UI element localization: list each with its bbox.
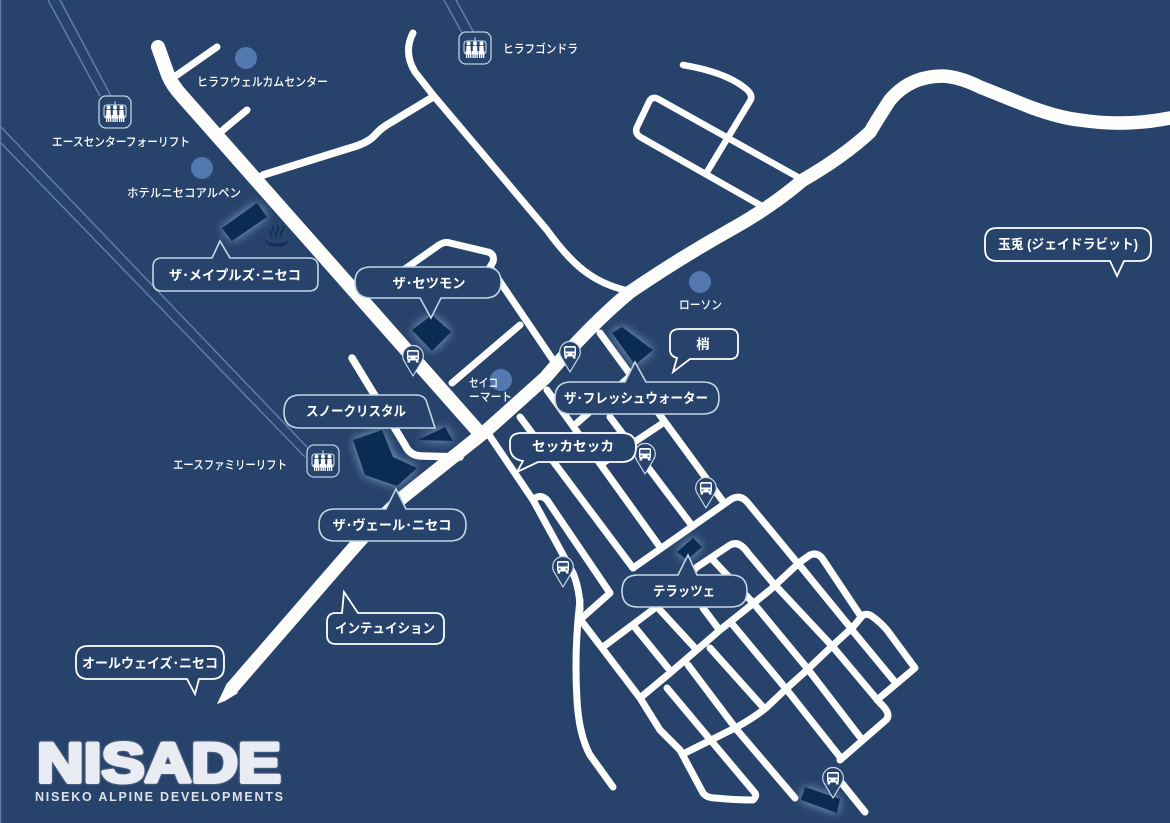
callout: the freshwater xyxy=(555,362,719,414)
main road tapered tip xyxy=(217,683,238,704)
poi: seicomart xyxy=(469,369,512,404)
poi: lawson xyxy=(679,271,722,312)
central cross streets xyxy=(577,372,635,423)
south loop street xyxy=(583,623,756,800)
setsumon loop xyxy=(375,242,553,360)
callout: jade rabbit: 玉兎 (ジェイドラビット) xyxy=(998,236,1138,252)
building: the setsumon xyxy=(412,315,451,351)
bus stop pin xyxy=(696,478,716,508)
callout: the freshwater: ザ･フレッシュウォーター xyxy=(564,391,708,406)
logo: nisade: NISEKO ALPINE DEVELOPMENTS xyxy=(35,790,283,804)
north side streets xyxy=(177,47,217,75)
poi: hirafu welcome center xyxy=(197,47,328,89)
light block between streets xyxy=(605,440,690,545)
poi: lawson: ローソン xyxy=(679,298,722,312)
building: snow crystal xyxy=(418,427,453,441)
callout: kozue xyxy=(670,329,738,372)
left edge line xyxy=(0,0,1,823)
callout: the vale niseko: ザ･ヴェール･ニセコ xyxy=(332,517,452,533)
poi: seicomart: セイコ xyxy=(469,376,498,390)
lift: ace center four lift xyxy=(52,96,190,149)
callout: the vale niseko xyxy=(319,489,466,541)
callout: jade rabbit xyxy=(985,228,1151,276)
callout: snow crystal: スノークリスタル xyxy=(306,404,406,419)
ski lift lines xyxy=(0,0,474,457)
building: the maples niseko xyxy=(222,203,267,241)
bus stop pin xyxy=(823,768,843,798)
lift: ace family lift xyxy=(173,445,339,477)
icon: onsen xyxy=(266,225,288,246)
west street and loop xyxy=(487,432,580,610)
callout: always niseko xyxy=(76,646,224,694)
building: the vale niseko xyxy=(353,430,417,486)
lift: ace family lift: エースファミリーリフト xyxy=(173,458,287,472)
poi: hirafu welcome center: ヒラフウェルカムセンター xyxy=(197,75,328,89)
poi: seicomart: ーマート xyxy=(469,390,512,404)
cross streets xyxy=(633,497,795,568)
callout: sekka sekka: セッカセッカ xyxy=(532,439,614,454)
main road north-west to centre xyxy=(158,47,477,430)
building: terrasse xyxy=(677,538,702,560)
lift: hirafu gondola xyxy=(459,32,578,64)
long parallel streets xyxy=(520,417,633,568)
callout: the maples niseko: ザ･メイプルズ･ニセコ xyxy=(169,267,301,283)
poi: hotel niseko alpen xyxy=(127,157,241,200)
vale side street xyxy=(352,358,460,457)
callout: the maples niseko xyxy=(153,241,318,291)
callout: terrasse xyxy=(622,555,747,607)
callout: sekka sekka xyxy=(510,433,636,472)
poi: hotel niseko alpen: ホテルニセコアルペン xyxy=(127,186,241,200)
road network: north and centre xyxy=(158,33,1170,704)
callout: intuition xyxy=(327,592,444,644)
callout: always niseko: オールウェイズ･ニセコ xyxy=(82,655,218,671)
bus stop pin xyxy=(553,557,573,587)
bus stop pin xyxy=(560,342,580,372)
callout: kozue: 梢 xyxy=(696,336,710,352)
lift: ace center four lift: エースセンターフォーリフト xyxy=(52,135,190,149)
callout: intuition: インテュイション xyxy=(335,621,435,636)
building: the freshwater xyxy=(612,327,653,365)
callout: the setsumon xyxy=(355,267,501,318)
road network: south-east grid xyxy=(487,390,915,812)
callout: terrasse: テラッツェ xyxy=(653,584,715,599)
building: south end xyxy=(801,787,840,813)
bus stop pin xyxy=(635,444,655,474)
main road south-west to east xyxy=(232,76,1170,688)
lift: hirafu gondola: ヒラフゴンドラ xyxy=(503,41,578,56)
callout: snow crystal xyxy=(284,395,435,428)
bus stop pin xyxy=(403,346,423,376)
callout: the setsumon: ザ･セツモン xyxy=(392,276,466,291)
logo: nisade: NISADE xyxy=(37,731,281,794)
